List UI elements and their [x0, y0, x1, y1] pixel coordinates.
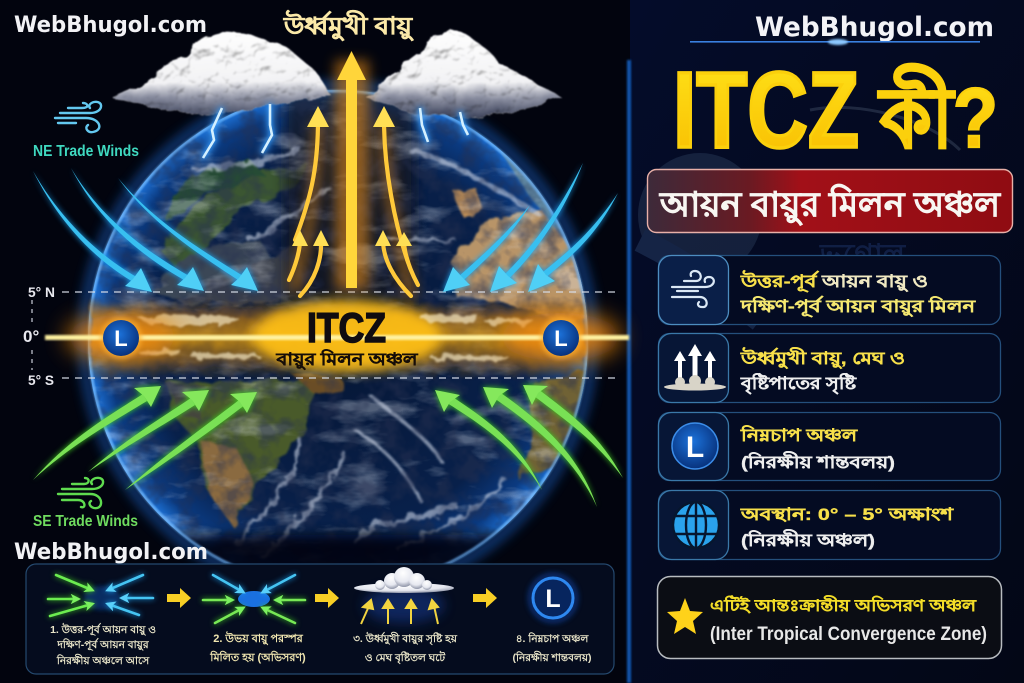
card text [740, 270, 976, 318]
step 1 text: দক্ষিণ-পূর্ব আয়ন বায়ুর [56, 637, 150, 652]
rising air arrows [289, 51, 418, 298]
icon: arrows over clouds [664, 344, 726, 390]
card text: এটিই আন্তঃক্রান্তীয় অভিসরণ অঞ্চল [710, 595, 977, 615]
cloud right [365, 30, 563, 117]
latitude labels [23, 284, 55, 388]
main title: ITCZ [673, 49, 859, 170]
step 4 icon: low pressure: L [545, 585, 561, 613]
step 2 text: মিলিত হয় (অভিসরণ) [209, 650, 306, 664]
latitude labels: 5° S [28, 372, 54, 388]
site name top right: WebBhugol.com [755, 12, 994, 43]
step 3 text: ও মেঘ বৃষ্টিতল ঘটে [365, 650, 446, 665]
central arrow [337, 51, 366, 288]
subtitle banner [648, 170, 1012, 232]
card text: উর্ধ্বমুখী বায়ু, মেঘ ও [740, 347, 905, 369]
cloud left [112, 32, 332, 115]
itcz label: বায়ুর মিলন অঞ্চল [275, 348, 419, 370]
card: location [658, 490, 1000, 560]
cloud texture [88, 100, 583, 545]
top heading: rising air: উর্ধ্বমুখী বায়ু [283, 10, 414, 41]
card text: উত্তর-পূর্ব আয়ন বায়ু ও [740, 270, 928, 293]
card text [740, 347, 905, 395]
card text: নিম্নচাপ অঞ্চল [740, 424, 859, 445]
right panel background [630, 0, 1024, 683]
step 3 text: ৩. উর্ধ্বমুখী বায়ুর সৃষ্টি হয় [353, 631, 458, 646]
arrow: step 1 to 2 [167, 588, 191, 608]
card text: (Inter Tropical Convergence Zone) [710, 624, 987, 645]
step 4 text [512, 631, 592, 664]
lightning bolts [203, 104, 468, 158]
continents and clouds [88, 90, 588, 564]
dark central swath [285, 90, 415, 305]
card: winds meet [658, 256, 1000, 324]
icon: l marker [672, 423, 718, 469]
equatorial glow band [45, 300, 629, 378]
card: rising air [658, 334, 1000, 402]
card: definition [658, 576, 1002, 658]
icon: wind [672, 271, 714, 307]
card text: বৃষ্টিপাতের সৃষ্টি [740, 372, 857, 395]
site name top left: WebBhugol.com [14, 13, 207, 38]
card text [710, 595, 987, 645]
watermark [638, 107, 960, 320]
step 1 text: 1. উত্তর-পূর্ব আয়ন বায়ু ও [50, 622, 156, 637]
step 2 text [209, 631, 306, 664]
low pressure marker right [540, 317, 582, 359]
site name bottom left: WebBhugol.com [14, 540, 208, 565]
panel: process steps [26, 564, 614, 674]
step 3 icon: cloud with rising air [354, 567, 454, 624]
bottom fade [174, 526, 503, 564]
step 4 text: (নিরক্ষীয় শান্তবলয়) [512, 650, 592, 664]
arrow: step 3 to 4 [473, 588, 497, 608]
card text: অবস্থান: 0° – 5° অক্ষাংশ [740, 505, 954, 524]
globe glow [84, 86, 592, 594]
se trade wind arrows, right [435, 385, 623, 507]
title underline glow [690, 39, 980, 45]
card text: দক্ষিণ-পূর্ব আয়ন বায়ুর মিলন [740, 295, 976, 318]
icon: ne wind [55, 102, 101, 132]
ne trade wind arrows, left [33, 168, 258, 292]
texture shading [88, 104, 588, 542]
step 2 text: 2. উভয় বায়ু পরস্পর [213, 631, 304, 646]
step 1 text: নিরক্ষীয় অঞ্চলে আসে [56, 653, 150, 667]
icon: l marker: L [686, 431, 704, 464]
itcz label [275, 304, 419, 370]
low pressure marker right: L [554, 326, 568, 351]
card text [740, 424, 895, 472]
card text [740, 505, 954, 550]
main title: কী? [877, 63, 998, 165]
watermark: ভূগোল [819, 239, 907, 276]
step 1 text [50, 622, 156, 667]
step 2 icon: winds meet [203, 575, 305, 623]
step 1 icon: winds approaching [48, 575, 153, 616]
step 3 text [353, 631, 458, 665]
low pressure marker left: L [114, 326, 128, 351]
step 4 text: ৪. নিম্নচাপ অঞ্চল [516, 631, 589, 645]
ocean [88, 90, 588, 590]
latitude labels: 5° N [28, 284, 55, 300]
icon: star [667, 598, 703, 634]
low pressure marker left [100, 317, 142, 359]
card text: (নিরক্ষীয় অঞ্চল) [741, 529, 875, 550]
latitude lines [32, 292, 620, 378]
card: low pressure [658, 412, 1000, 480]
card text: (নিরক্ষীয় শান্তবলয়) [741, 451, 895, 472]
latitude labels: 0° [23, 327, 39, 346]
se trade wind arrows, left [33, 386, 257, 490]
icon: se wind [58, 478, 103, 508]
icon: globe [673, 502, 719, 548]
globe [80, 86, 600, 595]
label: ne trade winds: NE Trade Winds [33, 143, 139, 160]
label: se trade winds: SE Trade Winds [33, 513, 138, 530]
arrow: step 2 to 3 [315, 588, 339, 608]
arrow glow [335, 60, 369, 290]
ne trade wind arrows, right [443, 163, 618, 292]
side arrows [289, 120, 418, 296]
step 4 icon: low pressure [527, 572, 579, 624]
panel divider [627, 60, 631, 683]
globe rim [89, 91, 587, 589]
itcz label: ITCZ [307, 304, 386, 351]
subtitle banner: আয়ন বায়ুর মিলন অঞ্চল [659, 184, 1002, 226]
